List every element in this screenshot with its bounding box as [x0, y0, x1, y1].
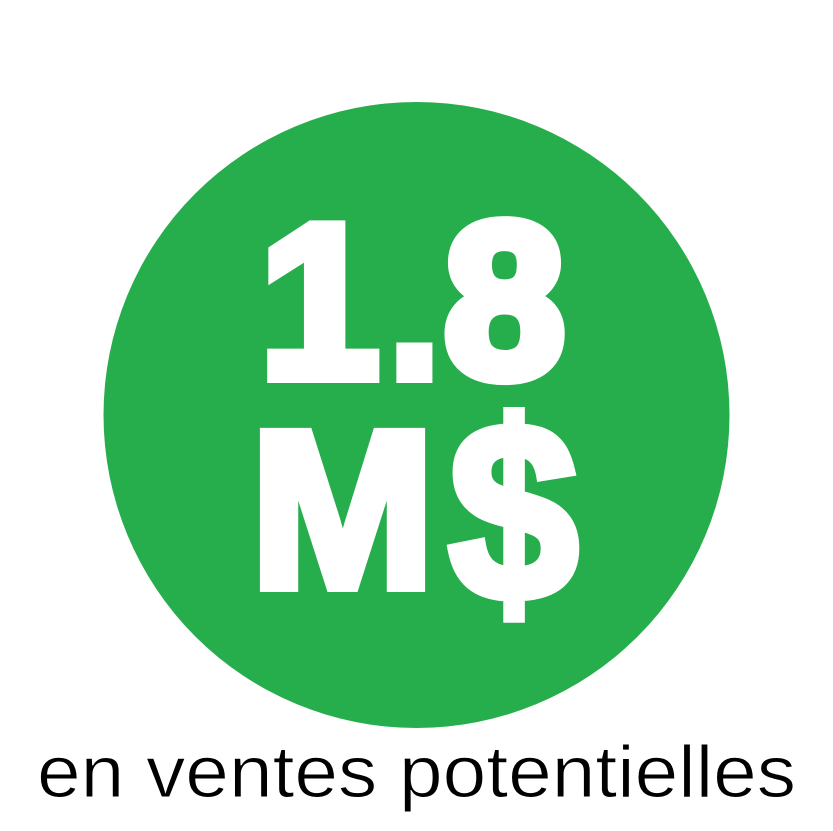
caption: en ventes potentielles [37, 732, 796, 813]
figure: 1.8 [260, 171, 564, 430]
figure: M$: $ [449, 372, 578, 653]
figure: 1.8: 1 [260, 180, 380, 424]
panel: green circle [104, 102, 730, 728]
figure: M$: M [250, 385, 435, 635]
figure: 1.8: . [384, 171, 444, 430]
figure: M$ [250, 372, 578, 653]
figure: 1.8: 8 [444, 179, 564, 423]
